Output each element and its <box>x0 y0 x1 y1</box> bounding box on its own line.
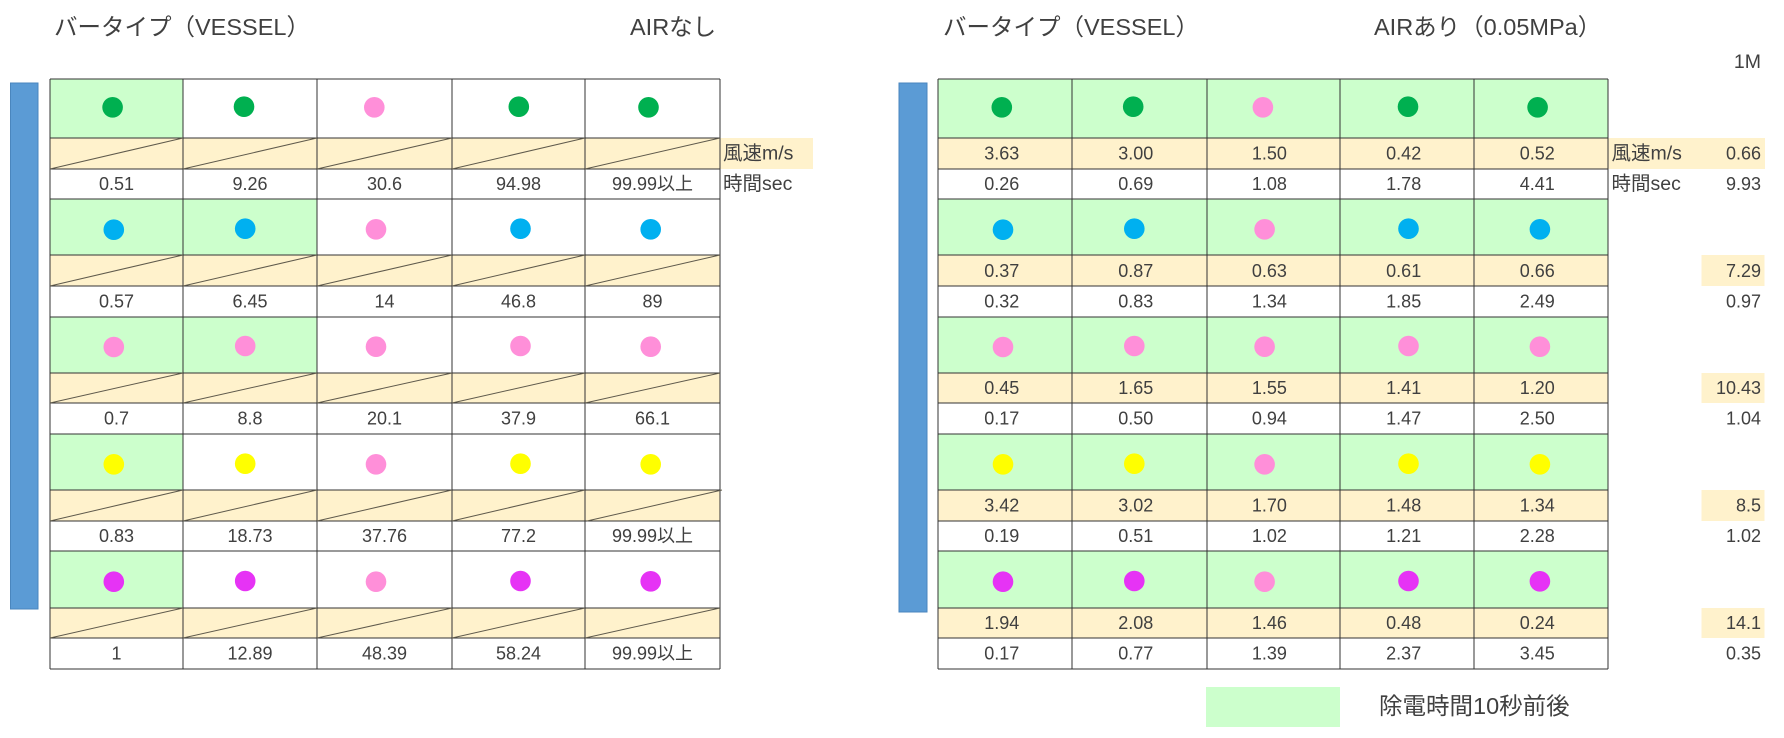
wind speed values row 5: 1.46 <box>1252 613 1287 633</box>
time values row 1: 1.08 <box>1252 174 1287 194</box>
time values row 5: 58.24 <box>496 644 541 664</box>
time values row 3 <box>984 408 1555 428</box>
time values row 2 <box>984 292 1555 312</box>
time values row 2: 0.32 <box>984 292 1019 312</box>
time values row 4: 1.02 <box>1252 526 1287 546</box>
wind speed band cells <box>938 138 1765 638</box>
time values row 3: 0.17 <box>984 408 1019 428</box>
dots row 3 <box>104 336 661 357</box>
legend <box>1206 687 1570 727</box>
wind speed values row 2: 0.37 <box>984 261 1019 281</box>
time values row 5: 1.39 <box>1252 644 1287 664</box>
wind speed values row 1: 3.00 <box>1118 144 1153 164</box>
green highlight cells <box>938 79 1608 608</box>
dots row 1 <box>992 96 1548 118</box>
title: right panel: バータイプ（VESSEL） <box>943 14 1199 40</box>
dots row 5 <box>993 571 1550 592</box>
wind speed values row 5: 0.24 <box>1520 613 1555 633</box>
1M column values: 7.29 <box>1726 261 1761 281</box>
dots row 4 <box>104 453 661 475</box>
table grid <box>938 79 1608 669</box>
time values row 4: 1.21 <box>1386 526 1421 546</box>
time values row 4: 0.51 <box>1118 526 1153 546</box>
wind speed values row 4: 1.34 <box>1520 496 1555 516</box>
wind speed values row 2: 0.66 <box>1520 261 1555 281</box>
legend swatch <box>1206 687 1340 727</box>
time values row 5: 99.99以上 <box>612 644 693 664</box>
1M column values: 0.97 <box>1726 292 1761 312</box>
table grid <box>50 79 720 669</box>
time values row 1: 99.99以上 <box>612 174 693 194</box>
time values row 5: 48.39 <box>362 644 407 664</box>
column label: 1M: 1M <box>1734 51 1761 73</box>
time values row 5 <box>111 644 693 664</box>
time values row 4: 2.28 <box>1520 526 1555 546</box>
wind speed values row 1: 0.42 <box>1386 144 1421 164</box>
panel: right table, with air <box>938 79 1765 669</box>
1M column values: 14.1 <box>1726 613 1761 633</box>
time values row 3: 8.8 <box>237 408 263 428</box>
time values row 4 <box>984 526 1555 546</box>
1M column values: 10.43 <box>1716 378 1761 398</box>
time values row 3: 66.1 <box>635 408 670 428</box>
time values row 2 <box>99 292 663 312</box>
1M column values: 0.66 <box>1726 144 1761 164</box>
title: left panel: バータイプ（VESSEL） <box>54 14 310 40</box>
time values row 4 <box>99 526 693 546</box>
row label: wind speed: 風速m/s <box>723 142 794 164</box>
wind speed values row 5 <box>984 613 1555 633</box>
time values row 1: 30.6 <box>367 174 402 194</box>
wind speed values row 3: 1.41 <box>1386 378 1421 398</box>
wind speed values row 4: 1.70 <box>1252 496 1287 516</box>
panel: left table, no air <box>50 79 813 669</box>
time values row 2: 6.45 <box>232 292 268 312</box>
1M column values: 9.93 <box>1726 174 1761 194</box>
time values row 3 <box>104 408 670 428</box>
time values row 2: 89 <box>642 292 663 312</box>
time values row 1 <box>984 174 1555 194</box>
green highlight cells <box>50 79 317 608</box>
time values row 3: 0.50 <box>1118 408 1153 428</box>
time values row 3: 0.94 <box>1252 408 1287 428</box>
time values row 1: 4.41 <box>1520 174 1555 194</box>
1M column values: 0.35 <box>1726 644 1761 664</box>
dots row 1 <box>102 96 659 118</box>
wind speed values row 5: 2.08 <box>1118 613 1153 633</box>
time values row 2: 46.8 <box>501 292 536 312</box>
condition label: with air: AIRあり（0.05MPa） <box>1374 14 1601 40</box>
wind speed values row 3: 1.55 <box>1252 378 1287 398</box>
row label: time: 時間sec <box>1612 173 1681 195</box>
wind speed values row 3: 0.45 <box>984 378 1019 398</box>
wind speed values row 5: 0.48 <box>1386 613 1421 633</box>
wind speed values row 2: 0.63 <box>1252 261 1287 281</box>
wind speed values row 1: 3.63 <box>984 144 1019 164</box>
wind speed values row 1 <box>984 144 1555 164</box>
1M column values: 1.02 <box>1726 526 1761 546</box>
wind speed values row 4 <box>984 496 1555 516</box>
1M column values: 8.5 <box>1736 496 1761 516</box>
time values row 5 <box>984 644 1555 664</box>
time values row 4: 37.76 <box>362 526 407 546</box>
dots row 2 <box>993 218 1550 240</box>
time values row 4: 99.99以上 <box>612 526 693 546</box>
time values row 3: 1.47 <box>1386 408 1421 428</box>
dots row 3 <box>993 336 1550 357</box>
time values row 2: 0.57 <box>99 292 134 312</box>
1M column values <box>1716 144 1761 664</box>
wind speed values row 2 <box>984 261 1555 281</box>
time values row 1: 9.26 <box>232 174 268 194</box>
time values row 1: 0.51 <box>99 174 134 194</box>
time values row 1: 0.26 <box>984 174 1019 194</box>
wind speed values row 4: 3.42 <box>984 496 1019 516</box>
time values row 3: 2.50 <box>1520 408 1555 428</box>
wind speed band cells <box>50 138 813 638</box>
diagonal strikes for no wind data <box>50 138 722 638</box>
time values row 1: 94.98 <box>496 174 541 194</box>
bar: right vessel <box>899 83 927 612</box>
wind speed values row 1: 1.50 <box>1252 144 1287 164</box>
wind speed values row 4: 3.02 <box>1118 496 1153 516</box>
wind speed values row 1: 0.52 <box>1520 144 1555 164</box>
time values row 4: 77.2 <box>501 526 536 546</box>
time values row 4: 18.73 <box>227 526 273 546</box>
time values row 1 <box>99 174 693 194</box>
dots row 5 <box>104 571 661 592</box>
1M column values: 1.04 <box>1726 408 1761 428</box>
legend text: 除電時間10秒前後 <box>1379 693 1570 719</box>
time values row 2: 2.49 <box>1520 292 1555 312</box>
time values row 3: 0.7 <box>104 408 129 428</box>
time values row 4: 0.83 <box>99 526 134 546</box>
time values row 5: 0.17 <box>984 644 1019 664</box>
wind speed values row 3 <box>984 378 1555 398</box>
time values row 5: 12.89 <box>227 644 273 664</box>
time values row 4: 0.19 <box>984 526 1019 546</box>
time values row 3: 20.1 <box>367 408 402 428</box>
row label: wind speed: 風速m/s <box>1612 142 1682 164</box>
time values row 5: 1 <box>111 644 122 664</box>
time values row 5: 2.37 <box>1386 644 1421 664</box>
wind speed values row 4: 1.48 <box>1386 496 1421 516</box>
time values row 5: 3.45 <box>1520 644 1555 664</box>
bar: left vessel <box>10 83 38 609</box>
wind speed values row 5: 1.94 <box>984 613 1019 633</box>
dots row 2 <box>104 218 661 240</box>
wind speed values row 3: 1.20 <box>1520 378 1555 398</box>
time values row 2: 0.83 <box>1118 292 1153 312</box>
time values row 1: 1.78 <box>1386 174 1421 194</box>
row label: time: 時間sec <box>723 173 793 195</box>
time values row 2: 1.34 <box>1252 292 1287 312</box>
wind speed values row 3: 1.65 <box>1118 378 1153 398</box>
condition label: no air: AIRなし <box>630 14 716 40</box>
time values row 3: 37.9 <box>501 408 536 428</box>
dots row 4 <box>993 453 1550 475</box>
time values row 1: 0.69 <box>1118 174 1153 194</box>
wind speed values row 2: 0.87 <box>1118 261 1153 281</box>
time values row 2: 1.85 <box>1386 292 1421 312</box>
wind speed values row 2: 0.61 <box>1386 261 1421 281</box>
time values row 5: 0.77 <box>1118 644 1153 664</box>
time values row 2: 14 <box>374 292 395 312</box>
